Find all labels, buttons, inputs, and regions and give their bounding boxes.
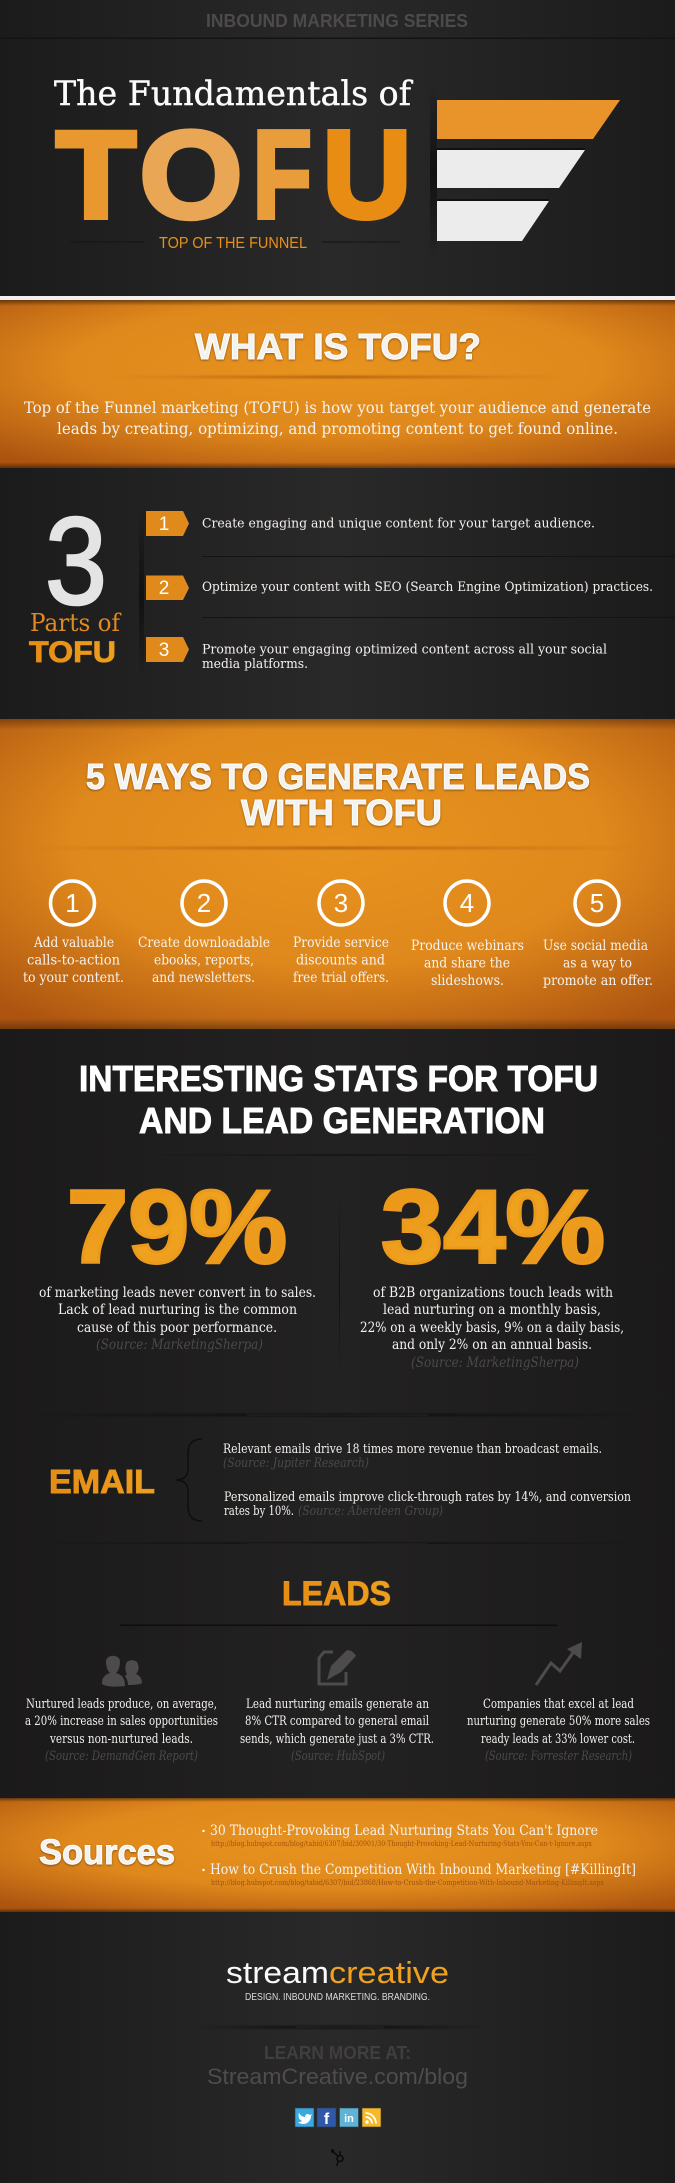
- lead fact 1: Nurtured leads produce, on average,: [26, 1697, 217, 1712]
- panel: what is tofu: [0, 300, 675, 468]
- stat: 79%: of marketing leads never convert in to sales.: [39, 1285, 316, 1301]
- step 2: 2: [159, 578, 169, 599]
- way 3: 3: [334, 888, 348, 918]
- step 1: 1: [159, 514, 169, 535]
- white divider band: [0, 296, 675, 300]
- panel: interesting stats: [0, 1029, 675, 1415]
- step 1: [146, 511, 595, 536]
- stat: 79%: Lack of lead nurturing is the common: [58, 1302, 297, 1318]
- source 1: 30 Thought-Provoking Lead Nurturing Stats You Can't Ignore: [210, 1823, 598, 1839]
- wordmark: TOFU: U: [322, 106, 412, 244]
- panel: sources: [0, 1798, 675, 1912]
- panel: series strip: [0, 0, 675, 39]
- email facts: (Source: Jupiter Research): [223, 1456, 369, 1471]
- way 5: Use social media: [543, 938, 648, 954]
- stat: 34%: of B2B organizations touch leads with: [373, 1285, 613, 1301]
- way 1: 1: [65, 888, 80, 918]
- panel: 3 parts of tofu: [0, 468, 675, 719]
- lead fact 2: [240, 1697, 434, 1764]
- way 4: Produce webinars: [411, 938, 524, 954]
- lead fact 2: sends, which generate just a 3% CTR.: [240, 1732, 434, 1747]
- panel: footer: [0, 1912, 675, 2183]
- way 5: 5: [590, 888, 604, 918]
- sources heading: Sources: [39, 1833, 175, 1872]
- stat: 79%: 79%: [67, 1170, 287, 1286]
- lead fact 1: [25, 1697, 218, 1764]
- email facts: [223, 1442, 632, 1519]
- heading: AND LEAD GENERATION: [139, 1100, 545, 1141]
- call to action: LEARN MORE AT:: [264, 2043, 411, 2063]
- stat: 34%: [360, 1170, 624, 1371]
- tagline: TOP OF THE FUNNEL: [159, 235, 307, 252]
- stat: 79%: [39, 1170, 316, 1353]
- lead fact 1: (Source: DemandGen Report): [45, 1749, 198, 1764]
- way 4: slideshows.: [431, 973, 504, 989]
- panel: 5 ways: [0, 719, 675, 1029]
- icon: people: [102, 1656, 142, 1687]
- way 1: Add valuable: [33, 935, 114, 951]
- lead fact 3: (Source: Forrester Research): [485, 1749, 632, 1764]
- way 3: [293, 881, 389, 986]
- step 3: 3: [159, 640, 169, 661]
- heading: [79, 1058, 598, 1141]
- lead fact 1: versus non-nurtured leads.: [49, 1732, 193, 1747]
- stat: 34%: lead nurturing on a monthly basis,: [383, 1302, 601, 1318]
- way 1: [23, 881, 124, 986]
- icon: facebook: f: [324, 2111, 330, 2128]
- email facts: rates by 10%.: [224, 1504, 294, 1519]
- social icons: [295, 2108, 381, 2128]
- step 3: Promote your engaging optimized content across all your social: [202, 642, 607, 658]
- email facts: (Source: Aberdeen Group): [298, 1504, 443, 1519]
- icon: twitter: [295, 2108, 314, 2127]
- wordmark: TOFU: F: [253, 106, 312, 244]
- way 2: [138, 881, 270, 986]
- icon: rss: [362, 2108, 381, 2127]
- way 2: and newsletters.: [152, 970, 255, 986]
- way 2: 2: [197, 888, 211, 918]
- step 2: [146, 576, 653, 600]
- source 2: [202, 1862, 636, 1887]
- heading: [86, 756, 590, 833]
- lead fact 2: 8% CTR compared to general email: [245, 1714, 429, 1729]
- series label: INBOUND MARKETING SERIES: [206, 11, 468, 31]
- step 1: Create engaging and unique content for your target audience.: [202, 516, 595, 532]
- wordmark: TOFU: T: [56, 106, 136, 244]
- wordmark: TOFU: O: [140, 106, 242, 244]
- way 4: [411, 881, 524, 989]
- source 2: http://blog.hubspot.com/blog/tabid/6307/bid/23868/How-to-Crush-the-Competition-With-Inbound-Marketing-KillingIt.aspx: [211, 1879, 604, 1887]
- logo: streamcreative: creative: [329, 1955, 449, 1990]
- lead fact 2: (Source: HubSpot): [291, 1749, 385, 1764]
- way 3: free trial offers.: [293, 970, 389, 986]
- heading: WHAT IS TOFU?: [195, 326, 481, 367]
- stat: 79%: (Source: MarketingSherpa): [96, 1337, 263, 1353]
- leads heading: LEADS: [282, 1575, 391, 1613]
- icon: funnel: [430, 85, 620, 260]
- email heading: EMAIL: [49, 1463, 155, 1500]
- way 1: to your content.: [23, 970, 124, 986]
- step 3: [146, 637, 607, 672]
- way 1: calls-to-action: [27, 952, 120, 968]
- wordmark: TOFU: [56, 106, 412, 244]
- stat: 34%: 22% on a weekly basis, 9% on a daily basis,: [360, 1320, 624, 1336]
- source 1: http://blog.hubspot.com/blog/tabid/6307/bid/30901/30-Thought-Provoking-Lead-Nurturing-Stats-You-Can-t-Ignore.aspx: [211, 1840, 592, 1848]
- call to action: [207, 2043, 468, 2089]
- stat: 34%: and only 2% on an annual basis.: [392, 1337, 592, 1353]
- icon: linkedin: in: [344, 2113, 354, 2125]
- email facts: Relevant emails drive 18 times more revenue than broadcast emails.: [223, 1442, 602, 1457]
- way 5: promote an offer.: [543, 973, 653, 989]
- tofu label: TOFU: [29, 636, 116, 669]
- lead fact 3: Companies that excel at lead: [483, 1697, 634, 1712]
- step 3: media platforms.: [202, 657, 308, 672]
- big number 3: 3: [45, 493, 107, 631]
- icon: growth arrow: [536, 1642, 582, 1685]
- description: leads by creating, optimizing, and promoting content to get found online.: [57, 419, 618, 438]
- icon: pencil note: [319, 1650, 356, 1684]
- icon: hubspot: [331, 2150, 343, 2166]
- lead fact 1: a 20% increase in sales opportunities: [25, 1714, 218, 1729]
- panel: leads: [0, 1544, 675, 1798]
- step 2: Optimize your content with SEO (Search Engine Optimization) practices.: [202, 580, 653, 595]
- description: [24, 398, 651, 438]
- way 3: Provide service: [293, 935, 389, 951]
- logo tagline: DESIGN. INBOUND MARKETING. BRANDING.: [245, 1991, 430, 2003]
- heading: INTERESTING STATS FOR TOFU: [79, 1058, 598, 1099]
- stat: 34%: (Source: MarketingSherpa): [411, 1355, 579, 1371]
- call to action: StreamCreative.com/blog: [207, 2064, 468, 2089]
- way 5: [543, 881, 653, 989]
- logo: streamcreative: stream: [226, 1955, 329, 1990]
- parts of label: Parts of: [30, 609, 122, 637]
- lead fact 3: [467, 1697, 650, 1764]
- title: The Fundamentals of: [54, 74, 413, 114]
- way 2: ebooks, reports,: [154, 952, 254, 968]
- way 2: Create downloadable: [138, 935, 270, 951]
- lead fact 2: Lead nurturing emails generate an: [246, 1697, 429, 1712]
- heading: WITH TOFU: [241, 792, 442, 833]
- stat: 34%: 34%: [381, 1170, 605, 1286]
- panel: header: [0, 39, 675, 296]
- way 3: discounts and: [296, 952, 385, 968]
- panel: email: [0, 1414, 675, 1545]
- logo: streamcreative: [226, 1955, 449, 1990]
- heading: 5 WAYS TO GENERATE LEADS: [86, 756, 590, 797]
- way 4: 4: [460, 888, 474, 918]
- way 4: and share the: [424, 956, 510, 972]
- source 1: [202, 1823, 598, 1848]
- stat: 79%: cause of this poor performance.: [77, 1320, 277, 1336]
- icon: brace: [176, 1439, 202, 1521]
- way 5: as a way to: [563, 956, 632, 972]
